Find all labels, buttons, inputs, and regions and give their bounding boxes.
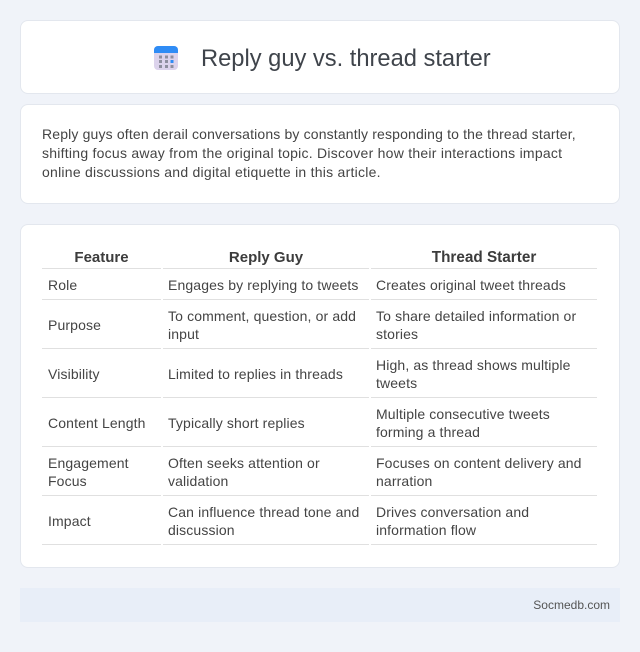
footer text: Socmedb.com — [533, 598, 610, 612]
cell: Limited to replies in threads — [168, 366, 343, 382]
cell: High, as thread shows multiple — [376, 357, 571, 373]
cell: forming a thread — [376, 424, 480, 440]
cell — [376, 406, 550, 440]
panel: introduction — [20, 104, 620, 204]
table header: Thread Starter: Thread Starter — [432, 249, 536, 266]
text block: introduction: shifting focus away from the original topic. Discover how their interactions impact — [42, 145, 562, 161]
cell: information flow — [376, 522, 476, 538]
row: Role: Role — [48, 277, 77, 293]
row: Engagement Focus: Focus — [48, 473, 87, 489]
row: Visibility: Visibility — [48, 366, 100, 382]
cell: Typically short replies — [168, 415, 305, 431]
title: Reply guy vs. thread starter — [201, 46, 491, 72]
cell — [168, 308, 356, 342]
text block: introduction: online discussions and digital etiquette in this article. — [42, 164, 381, 180]
cell — [376, 357, 571, 391]
row: Engagement Focus: Engagement — [48, 455, 129, 471]
cell: input — [168, 326, 199, 342]
icon: calendar — [154, 46, 178, 70]
row: Impact: Impact — [48, 513, 91, 529]
cell: Can influence thread tone and — [168, 504, 359, 520]
cell: Often seeks attention or — [168, 455, 320, 471]
cell: To share detailed information or — [376, 308, 576, 324]
cell: Drives conversation and — [376, 504, 529, 520]
row: Engagement Focus — [48, 455, 129, 489]
cell: tweets — [376, 375, 417, 391]
table header: Feature: Feature — [74, 249, 129, 266]
footer bar — [20, 588, 620, 622]
cell: Creates original tweet threads — [376, 277, 566, 293]
cell: stories — [376, 326, 418, 342]
cell: validation — [168, 473, 228, 489]
cell: Multiple consecutive tweets — [376, 406, 550, 422]
cell: Focuses on content delivery and — [376, 455, 582, 471]
cell: narration — [376, 473, 432, 489]
cell: discussion — [168, 522, 235, 538]
cell: Engages by replying to tweets — [168, 277, 359, 293]
row: Content Length: Content Length — [48, 415, 146, 431]
cell — [376, 455, 582, 489]
cell — [168, 504, 359, 538]
text block: introduction: Reply guys often derail conversations by constantly responding to the thread starter, — [42, 126, 576, 142]
panel: title card — [20, 20, 620, 94]
cell — [376, 308, 576, 342]
cell: To comment, question, or add — [168, 308, 356, 324]
row: Purpose: Purpose — [48, 317, 101, 333]
cell — [376, 504, 529, 538]
cell — [168, 455, 320, 489]
text block: introduction — [42, 126, 576, 180]
table header: Reply Guy: Reply Guy — [229, 249, 303, 266]
panel: comparison table — [20, 224, 620, 568]
